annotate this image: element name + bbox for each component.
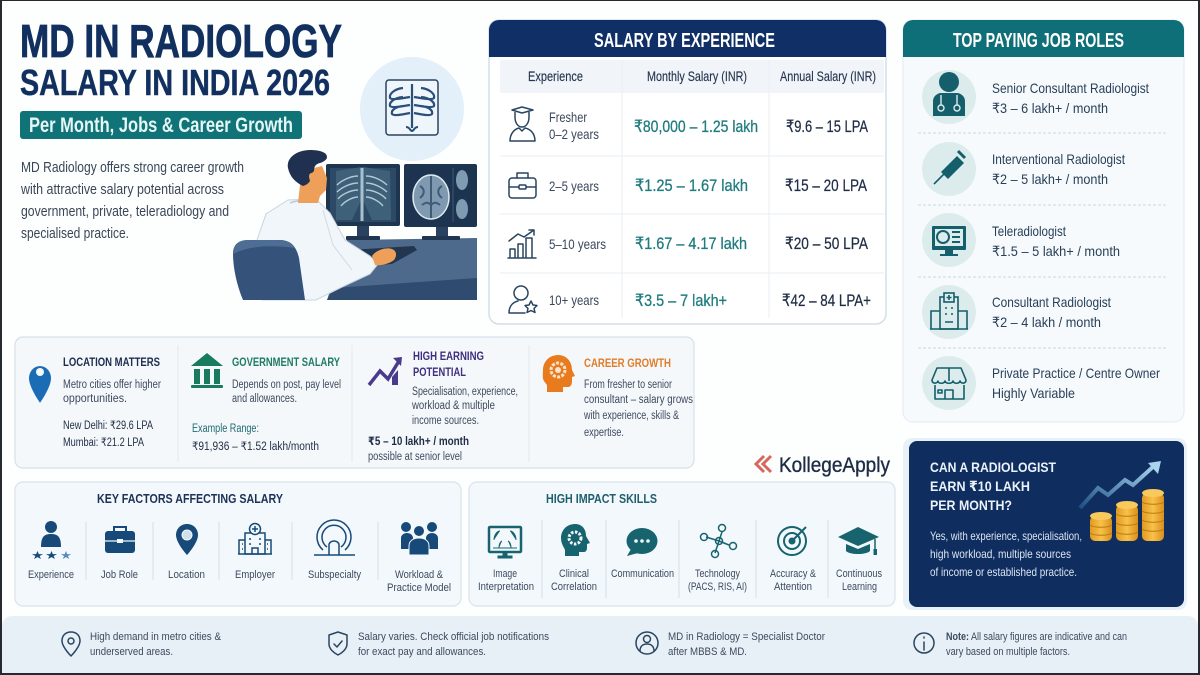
career growth: consultant – salary grows — [584, 394, 693, 406]
logo: KollegeApply: KollegeApply — [779, 454, 890, 477]
footer note: salary varies: Salary varies. Check official job notifications — [358, 631, 549, 643]
government salary: ₹91,936 – ₹1.52 lakh/month — [192, 441, 319, 453]
role: teleradiologist: ₹1.5 – 5 lakh+ / month — [992, 243, 1120, 259]
row: 2-5 years: ₹15 – 20 LPA — [785, 176, 868, 195]
column headings — [500, 60, 884, 93]
row: 5-10 years — [508, 230, 869, 258]
row: fresher: ₹9.6 – 15 LPA — [786, 117, 868, 136]
row: 5-10 years: 5–10 years — [549, 236, 606, 252]
row: 2-5 years: 2–5 years — [549, 178, 599, 194]
row: 10+ years: 10+ years — [549, 292, 599, 308]
callout: can a radiologist earn 10 lakh: of income or established practice. — [930, 565, 1077, 579]
icon: chest x-ray in circle — [360, 57, 464, 161]
location matters: Metro cities offer higher — [63, 379, 161, 391]
factor: subspecialty: Subspecialty — [308, 569, 361, 581]
skill: image interpretation: Image — [493, 568, 517, 580]
callout: can a radiologist earn 10 lakh: Yes, with experience, specialisation, — [930, 529, 1082, 543]
role: private practice: Highly Variable — [992, 385, 1075, 401]
title — [20, 15, 342, 103]
row: 10+ years: ₹42 – 84 LPA+ — [782, 291, 871, 310]
column headings: Experience — [528, 68, 583, 84]
factor: experience: ★ — [45, 550, 58, 562]
role: private practice — [922, 356, 1160, 410]
role: interventional: ₹2 – 5 lakh+ / month — [992, 171, 1108, 187]
location matters — [29, 355, 161, 449]
callout: can a radiologist earn 10 lakh: high workload, multiple sources — [930, 547, 1071, 561]
intro text: specialised practice. — [21, 226, 129, 242]
footer note: disclaimer — [914, 631, 1127, 658]
role: teleradiologist: Teleradiologist — [992, 223, 1066, 239]
panel: key factors — [15, 482, 461, 606]
callout: can a radiologist earn 10 lakh: EARN ₹10 LAKH — [930, 478, 1030, 494]
row: fresher: Fresher — [549, 109, 587, 125]
footer note: disclaimer: vary based on multiple factors. — [946, 646, 1070, 658]
footer note: demand — [62, 631, 222, 658]
intro text — [20, 160, 244, 242]
career growth: CAREER GROWTH — [584, 356, 671, 370]
panel: information strip — [15, 337, 694, 468]
skill: continuous learning: Continuous — [836, 568, 882, 580]
role: consultant: Consultant Radiologist — [992, 294, 1111, 310]
skill: clinical correlation — [551, 524, 597, 593]
intro text: with attractive salary potential across — [20, 182, 224, 198]
factor: workload: Workload & — [395, 569, 444, 581]
government salary: Example Range: — [192, 423, 259, 435]
skill: continuous learning — [836, 527, 882, 593]
location matters: opportunities. — [63, 393, 127, 405]
row: fresher — [510, 107, 868, 142]
career growth: expertise. — [584, 427, 624, 439]
intro text: government, private, teleradiology and — [21, 204, 229, 220]
row: 10+ years: ₹3.5 – 7 lakh+ — [635, 291, 727, 310]
high earning potential: ₹5 – 10 lakh+ / month — [368, 436, 469, 448]
skills heading: HIGH IMPACT SKILLS — [546, 491, 657, 506]
illustration: radiologist at monitors — [233, 150, 477, 300]
row: 2-5 years — [509, 173, 868, 198]
footer note: specialist doctor: after MBBS & MD. — [668, 646, 747, 658]
skill: image interpretation — [478, 527, 534, 593]
icon: rising arrow and coins — [1080, 461, 1164, 541]
role: consultant: ₹2 – 4 lakh / month — [992, 314, 1101, 330]
role: senior consultant: Senior Consultant Radiologist — [992, 80, 1149, 96]
government salary — [191, 353, 341, 453]
factor: subspecialty — [308, 520, 361, 581]
title: SALARY IN INDIA 2026 — [20, 62, 330, 103]
factor: location — [168, 524, 205, 581]
factor: employer: Employer — [235, 569, 275, 581]
roles header — [903, 20, 1184, 57]
subtitle banner — [20, 111, 302, 139]
row: fresher: ₹80,000 – 1.25 lakh — [634, 117, 758, 136]
high earning potential: income sources. — [412, 415, 479, 427]
footer strip — [2, 616, 1198, 675]
skill: accuracy: Accuracy & — [770, 568, 817, 580]
factor: experience: ★ — [31, 550, 44, 562]
location matters: LOCATION MATTERS — [63, 355, 160, 369]
high earning potential — [368, 349, 518, 463]
factor: experience: Experience — [28, 569, 74, 581]
role: teleradiologist — [922, 213, 1120, 267]
footer note: disclaimer: Note: All salary figures are indicative and can — [946, 631, 1127, 643]
intro text: MD Radiology offers strong career growth — [21, 160, 244, 176]
role: senior consultant — [922, 70, 1149, 124]
skill: technology: (PACS, RIS, AI) — [688, 581, 747, 593]
role: interventional — [922, 142, 1125, 196]
skill: continuous learning: Learning — [842, 581, 877, 593]
skill: clinical correlation: Clinical — [559, 568, 589, 580]
skill: image interpretation: Interpretation — [478, 581, 534, 593]
row: 5-10 years: ₹20 – 50 LPA — [785, 234, 869, 253]
high earning potential: workload & multiple — [411, 400, 495, 412]
skill: clinical correlation: Correlation — [551, 581, 597, 593]
factor: job role — [101, 527, 138, 581]
high earning potential: Specialisation, experience, — [412, 386, 518, 398]
factor: experience — [28, 521, 74, 581]
footer note: salary varies — [329, 631, 549, 658]
government salary: and allowances. — [232, 393, 297, 405]
callout: can a radiologist earn 10 lakh — [903, 438, 1187, 610]
row: 2-5 years: ₹1.25 – 1.67 lakh — [635, 176, 748, 195]
footer note: demand: underserved areas. — [90, 646, 173, 658]
role: private practice: Private Practice / Centre Owner — [992, 365, 1160, 381]
table header bar — [489, 20, 886, 57]
role: consultant — [922, 285, 1111, 339]
column headings: Annual Salary (INR) — [780, 68, 876, 84]
panel: top paying job roles — [903, 20, 1184, 422]
skill: technology: Technology — [695, 568, 740, 580]
high earning potential: POTENTIAL — [413, 365, 466, 379]
panel: high impact skills — [469, 482, 895, 606]
callout: can a radiologist earn 10 lakh: PER MONTH? — [930, 497, 1012, 513]
high earning potential: HIGH EARNING — [413, 349, 484, 363]
location matters: Mumbai: ₹21.2 LPA — [63, 437, 144, 449]
role: interventional: Interventional Radiologist — [992, 151, 1125, 167]
row: 10+ years — [509, 286, 871, 313]
role: senior consultant: ₹3 – 6 lakh+ / month — [992, 100, 1108, 116]
factor: experience: ★ — [60, 550, 72, 562]
column headings: Monthly Salary (INR) — [647, 68, 747, 84]
factor: workload: Practice Model — [387, 582, 451, 594]
footer note: salary varies: for exact pay and allowances. — [358, 646, 486, 658]
factor: employer — [235, 524, 275, 581]
skill: communication: Communication — [611, 568, 674, 580]
footer note: demand: High demand in metro cities & — [90, 631, 222, 643]
factor: job role: Job Role — [101, 569, 138, 581]
row: fresher: 0–2 years — [549, 126, 599, 142]
high earning potential: possible at senior level — [368, 451, 462, 463]
government salary: Depends on post, pay level — [232, 379, 341, 391]
row: 5-10 years: ₹1.67 – 4.17 lakh — [635, 234, 747, 253]
career growth — [543, 355, 693, 439]
footer note: specialist doctor: MD in Radiology = Specialist Doctor — [668, 631, 825, 643]
factor: location: Location — [168, 569, 205, 581]
location matters: New Delhi: ₹29.6 LPA — [63, 420, 153, 432]
roles header: TOP PAYING JOB ROLES — [953, 30, 1124, 52]
factor: workload — [387, 522, 451, 594]
footer note: specialist doctor — [636, 631, 825, 658]
title: MD IN RADIOLOGY — [20, 15, 342, 67]
government salary: GOVERNMENT SALARY — [232, 355, 340, 369]
skill: accuracy — [770, 527, 817, 593]
subtitle banner: Per Month, Jobs & Career Growth — [29, 114, 293, 137]
skill: technology — [688, 524, 747, 593]
career growth: with experience, skills & — [583, 410, 679, 422]
panel: salary by experience — [489, 20, 886, 324]
key factors heading: KEY FACTORS AFFECTING SALARY — [97, 491, 283, 506]
table header bar: SALARY BY EXPERIENCE — [594, 30, 775, 52]
career growth: From fresher to senior — [584, 379, 672, 391]
callout: can a radiologist earn 10 lakh: CAN A RADIOLOGIST — [930, 459, 1056, 475]
skill: accuracy: Attention — [774, 581, 812, 593]
skill: communication — [611, 528, 674, 580]
